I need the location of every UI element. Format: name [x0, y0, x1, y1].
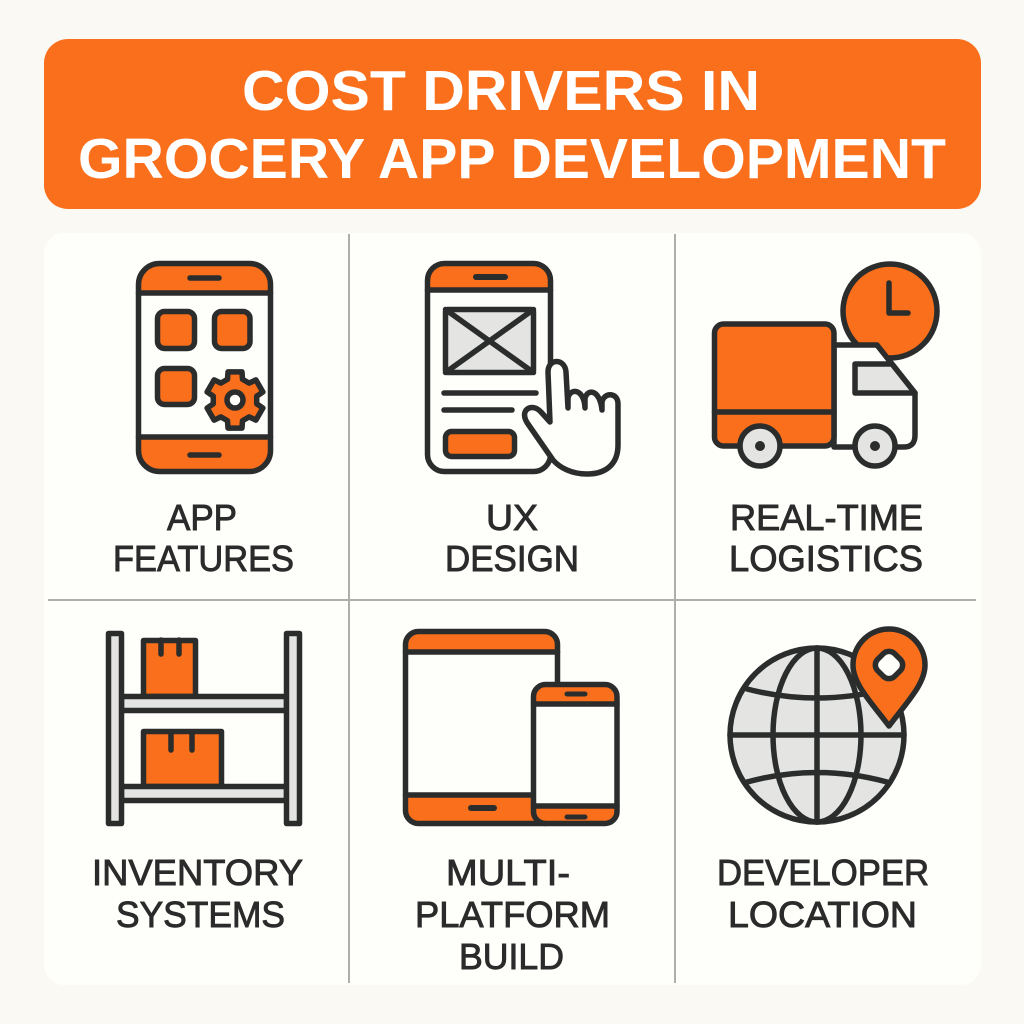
label: app features: FEATURES [113, 538, 294, 579]
label: developer location: DEVELOPER [717, 852, 929, 893]
icon: globe with map pin [730, 629, 925, 822]
label: multi-platform build: MULTI- [446, 852, 570, 893]
icon: smartphone with gear [138, 264, 270, 472]
grid panel [44, 233, 981, 985]
label: ux design: UX [486, 497, 538, 538]
label: real-time logistics: LOGISTICS [729, 538, 923, 579]
label: inventory systems: SYSTEMS [116, 894, 285, 935]
label: ux design: DESIGN [445, 538, 579, 579]
label: multi-platform build [415, 852, 610, 977]
label: developer location [717, 852, 929, 935]
icon: warehouse shelves [108, 634, 300, 824]
label: developer location: LOCATION [728, 894, 917, 935]
title banner [44, 39, 981, 209]
label: app features [113, 497, 294, 579]
label: ux design [445, 497, 579, 579]
icon: wireframe with hand [428, 264, 618, 474]
panel: inventory systems [92, 634, 303, 935]
panel: ux design [428, 264, 618, 579]
title banner: COST DRIVERS IN [242, 59, 760, 123]
label: real-time logistics [729, 497, 923, 579]
panel: app features [113, 264, 294, 579]
label: multi-platform build: PLATFORM [415, 894, 610, 935]
label: app features: APP [167, 497, 237, 538]
panel: multi-platform build [406, 632, 617, 977]
label: multi-platform build: BUILD [459, 936, 564, 977]
label: inventory systems [92, 852, 303, 935]
label: real-time logistics: REAL-TIME [730, 497, 923, 538]
label: inventory systems: INVENTORY [92, 852, 303, 893]
icon: truck with clock [714, 264, 937, 466]
icon: tablet and phone [406, 632, 617, 824]
panel: developer location [717, 629, 929, 935]
title banner: GROCERY APP DEVELOPMENT [78, 127, 946, 191]
panel: real-time logistics [714, 264, 937, 579]
